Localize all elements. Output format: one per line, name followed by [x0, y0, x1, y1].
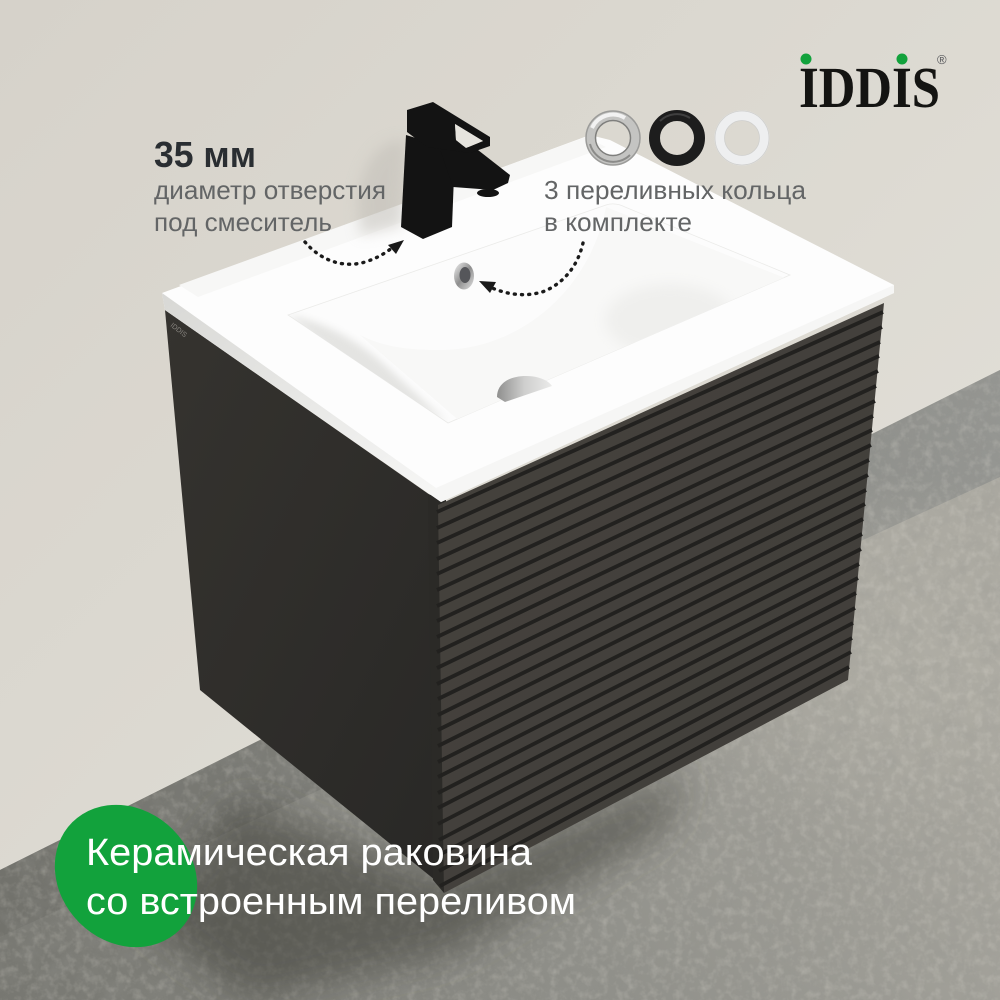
heading: ceramic sink with built-in overflow: Керамическая раковина [86, 832, 533, 874]
drain [497, 376, 552, 402]
cabinet side panel [165, 310, 435, 880]
callout: 35 mm hole diameter: диаметр отверстия [154, 175, 386, 205]
cabinet side logo mark: IDDIS [169, 322, 188, 339]
green circle [26, 776, 226, 976]
sink countertop surface [162, 135, 894, 502]
cabinet [165, 303, 884, 893]
faucet shadow [358, 140, 406, 235]
stone floor and skirting [0, 360, 1000, 1000]
icon: black faucet [401, 102, 510, 239]
overflow ring [454, 262, 474, 290]
logo: IDDIS: ® [937, 52, 947, 67]
callout: 3 overflow rings included [544, 175, 807, 237]
faucet handle [407, 102, 490, 153]
icons: three overflow rings [586, 111, 769, 165]
icon: chrome ring [586, 111, 640, 165]
sink back ledge [179, 137, 606, 297]
arrow: to overflow ring [479, 243, 583, 295]
arrow: to faucet hole [305, 240, 404, 264]
sink right lip [436, 285, 894, 502]
logo: IDDIS: IDDIS [799, 55, 940, 120]
faucet handle opening [455, 124, 483, 148]
basin shading [457, 278, 784, 419]
cabinet front corner strip [428, 494, 446, 893]
callout: 3 overflow rings included: в комплекте [544, 207, 692, 237]
faucet body [401, 135, 455, 239]
callout: 35 mm hole diameter [154, 134, 386, 237]
basin [288, 204, 790, 430]
ceramic sink [162, 135, 894, 502]
cabinet ribbed front [437, 303, 884, 893]
callout: 3 overflow rings included: 3 переливных кольца [544, 175, 807, 205]
sink left lip [162, 293, 441, 502]
callout: 35 mm hole diameter: под смеситель [154, 207, 332, 237]
heading: ceramic sink with built-in overflow [86, 832, 576, 923]
icon: black ring [654, 114, 700, 160]
callout: 35 mm hole diameter: 35 мм [154, 134, 256, 175]
icon: white ring [715, 111, 769, 165]
heading: ceramic sink with built-in overflow: со встроенным переливом [86, 881, 576, 923]
faucet spout [436, 138, 510, 190]
